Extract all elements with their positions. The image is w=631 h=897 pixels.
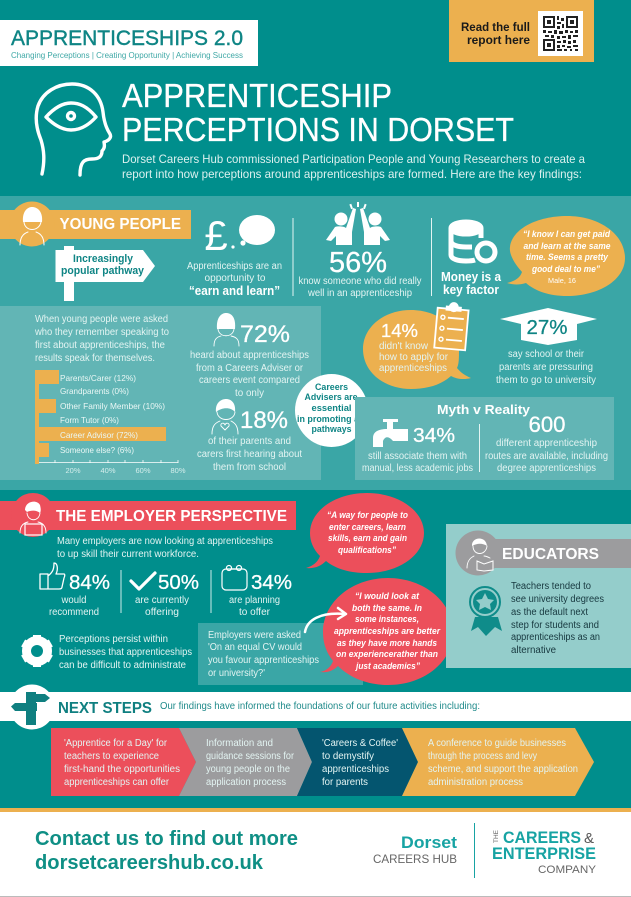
logo: The Careers & Enterprise Company: ENTERPRISE (492, 844, 596, 863)
contact text: dorsetcareershub.co.uk (35, 851, 264, 874)
quote bubble: male, 16: and learn at the same (524, 241, 611, 252)
icon: graduation cap with 27%: 27% (526, 316, 568, 339)
icon: young person with hard hat (214, 313, 239, 346)
stat: 50% currently offering: are currently (135, 595, 189, 606)
bar chart: first contact: 20% (65, 466, 81, 475)
text: pressured to go to university: them to go to university (496, 375, 596, 386)
logo: The Careers & Enterprise Company: THE (494, 830, 500, 843)
stat: 84% would recommend: 84% (69, 571, 110, 594)
text: earn and learn: Apprenticeships are an (187, 261, 282, 272)
bar chart: first contact: Parents/Carer (12%) (60, 373, 136, 383)
icon: graduation cap with 27% (500, 308, 597, 345)
bar chart: first contact: Other Family Member (10%) (60, 401, 165, 411)
text: money is a key factor: key factor (443, 283, 499, 297)
quote bubble: male, 16: Male, 16 (548, 278, 576, 285)
logo: The Careers & Enterprise Company: CAREERS (503, 828, 581, 847)
stat: 18%: carers first hearing about (197, 449, 302, 460)
stat: 50% currently offering: 50% (158, 571, 199, 594)
title (122, 78, 514, 149)
panel: myth v reality: degree apprenticeships (497, 463, 596, 474)
arrow step: conference (402, 728, 594, 796)
quote bubble: a way for people: “A way for people to (327, 510, 408, 521)
signpost: increasingly popular pathway: Increasingly (73, 253, 134, 265)
intro text: report into how perceptions around apprenticeships are formed. Here are the key findings: (122, 167, 582, 181)
quote bubble: look at both the same: on experiencerather than (336, 649, 438, 660)
arrow step: conference: through the process and levy (428, 751, 537, 762)
text: teachers tended to: see university degrees (511, 594, 604, 605)
quote bubble: look at both the same: “I would look at (355, 591, 420, 602)
heading: next steps: NEXT STEPS (58, 700, 152, 717)
intro text (122, 152, 585, 181)
stat: 18%: them from school (213, 462, 286, 473)
panel: employers were asked: you favour apprenticeships (208, 655, 319, 666)
panel: young people (0, 196, 631, 490)
heading: educators: EDUCATORS (502, 546, 599, 563)
bar chart: first contact: 40% (100, 466, 116, 475)
panel: employers were asked (198, 623, 363, 685)
callout: careers advisers are essential (295, 374, 368, 447)
contact text (35, 827, 298, 874)
logo: The Careers & Enterprise Company: & (584, 830, 594, 847)
signpost: increasingly popular pathway: popular pathway (61, 265, 145, 277)
quote bubble: a way for people: skills, earn and gain (328, 533, 407, 544)
arrow step: careers and coffee: apprenticeships (322, 764, 389, 775)
stat: 56%: 56% (329, 247, 387, 279)
icon: gear (21, 635, 53, 667)
panel: educators (446, 524, 631, 668)
callout: read the full report with QR code: report here (467, 33, 530, 47)
stat: 84% would recommend: would (61, 595, 86, 606)
stat: 56%: know someone who did really (298, 276, 422, 287)
arrow step: information and guidance: application process (206, 777, 286, 788)
panel: employers were asked: Employers were asked (208, 630, 301, 641)
icon: tap (373, 419, 408, 447)
arrow step: apprentice for a day (51, 728, 196, 796)
arrow step: apprentice for a day: teachers to experience (64, 751, 159, 762)
callout: careers advisers are essential: in promoting all (297, 414, 364, 424)
panel: myth v reality: still associate them with (368, 451, 467, 462)
text: chart intro: first about apprenticeships, the (35, 340, 165, 351)
panel: who they spoke to first (0, 306, 321, 480)
icon: rosette (470, 587, 502, 636)
text: teachers tended to: as the default next (511, 607, 588, 618)
quote bubble: a way for people: qualifications” (338, 545, 396, 556)
text: earn and learn (187, 261, 282, 298)
arrow step: careers and coffee (297, 728, 418, 796)
heading: the employer perspective (0, 493, 296, 537)
panel: employer perspective (0, 493, 453, 685)
callout: careers advisers are essential: essential (312, 403, 352, 413)
icon: check mark (131, 573, 155, 589)
logo: Dorset Careers Hub (373, 833, 457, 866)
heading: next steps (0, 684, 631, 730)
heading: next steps: Our findings have informed the foundations of our future activities including: (160, 701, 480, 712)
callout: careers advisers are essential: Advisers are (304, 392, 358, 402)
quote bubble: male, 16: “I know I can get paid (523, 229, 610, 240)
arrow step: conference: administration process (428, 777, 523, 788)
text: pressured to go to university: say school or their (508, 349, 585, 360)
stat: 72%: from a Careers Adviser or (196, 363, 304, 374)
quote bubble: look at both the same (320, 578, 453, 685)
callout: read the full report with QR code: Read the full (461, 20, 530, 34)
bar chart: first contact: Someone else? (6%) (60, 445, 134, 455)
text: perceptions persist (59, 634, 192, 671)
quote bubble: a way for people: enter careers, learn (329, 522, 406, 533)
bubble: 14% didn't know how to apply: how to apply for (379, 352, 449, 363)
header banner: Apprenticeships 2.0: Changing Perceptions | Creating Opportunity | Achieving Success (11, 50, 243, 60)
arrow step: information and guidance: guidance sessions for (206, 751, 295, 762)
footer (0, 808, 631, 897)
title: PERCEPTIONS IN DORSET (122, 112, 514, 149)
header banner: Apprenticeships 2.0: APPRENTICESHIPS 2.0 (11, 26, 243, 50)
stat: 34% planning to offer: to offer (239, 607, 271, 618)
panel: myth v reality: 34% (413, 424, 455, 447)
text: teachers tended to: alternative (511, 645, 556, 656)
arrow step: information and guidance: Information and (206, 738, 273, 749)
icon: coins (451, 222, 495, 261)
icon: calendar (222, 566, 247, 590)
icon: high five (326, 202, 390, 245)
text: employers upskilling (57, 536, 273, 560)
signpost: increasingly popular pathway (56, 246, 155, 301)
text: chart intro: results speak for themselves. (35, 353, 155, 364)
logo: Dorset Careers Hub: CAREERS HUB (373, 852, 457, 866)
arrow step: apprentice for a day: first-hand the opportunities (64, 764, 180, 775)
quote bubble: look at both the same: as they have more hands (337, 638, 437, 649)
bubble: 14% didn't know how to apply (363, 301, 471, 389)
arrow step: careers and coffee: for parents (322, 777, 368, 788)
bar chart: first contact: 60% (135, 466, 151, 475)
title: APPRENTICESHIP (122, 78, 392, 115)
text: teachers tended to: Teachers tended to (511, 581, 591, 592)
text: teachers tended to: step for students and (511, 620, 599, 631)
text: teachers tended to (511, 581, 604, 656)
text: perceptions persist: can be difficult to administrate (59, 660, 186, 671)
panel: myth v reality: routes are available, including (485, 451, 608, 462)
bubble: 14% didn't know how to apply: didn't know (379, 341, 429, 352)
stat: 34% planning to offer: 34% (251, 571, 292, 594)
callout: careers advisers are essential: pathways (312, 424, 352, 434)
arrow step: information and guidance: young people on the (206, 764, 290, 775)
icon: pound and thought bubble (204, 212, 275, 259)
arrow step: conference: A conference to guide businesses (428, 738, 566, 749)
logo: Dorset Careers Hub: Dorset (401, 833, 457, 852)
callout: careers advisers are essential: Careers (315, 382, 348, 392)
arrow step: conference: scheme, and support the application (428, 764, 578, 775)
arrow step: careers and coffee: to demystify (322, 751, 374, 762)
bar chart: first contact: 80% (170, 466, 186, 475)
quote bubble: look at both the same: just academics” (354, 661, 420, 672)
bar chart: first contact: Grandparents (0%) (60, 386, 129, 396)
panel: employers were asked: 'On an equal CV would (208, 642, 302, 653)
panel: myth v reality: Myth v Reality (437, 402, 531, 417)
quote bubble: male, 16: time. Seems a pretty (526, 252, 609, 263)
arrow: question to answer (305, 608, 346, 632)
stat: 18%: 18% (240, 407, 288, 434)
text: pressured to go to university (496, 349, 596, 386)
stat: 56%: well in an apprenticeship (307, 288, 412, 299)
quote bubble: male, 16 (507, 216, 625, 296)
text: earn and learn: opportunity to (204, 273, 266, 284)
arrow step: careers and coffee: 'Careers & Coffee' (322, 738, 398, 749)
heading: young people (0, 202, 191, 246)
text: employers upskilling: Many employers are now looking at apprenticeships (57, 536, 273, 547)
heading: educators (456, 530, 631, 576)
heading: the employer perspective: THE EMPLOYER PERSPECTIVE (56, 508, 287, 525)
bar chart: first contact (35, 370, 186, 475)
quote bubble: male, 16: good deal to me” (531, 264, 600, 275)
logo: The Careers & Enterprise Company: COMPANY (538, 864, 597, 876)
panel: myth v reality: 600 (528, 412, 566, 437)
quote bubble: a way for people (306, 493, 424, 573)
text: pressured to go to university: parents are pressuring (499, 362, 593, 373)
arrow step: information and guidance (179, 728, 312, 796)
stat: 72%: heard about apprenticeships (190, 350, 309, 361)
text: perceptions persist: Perceptions persist within (59, 634, 168, 645)
quote bubble: look at both the same: both the same. In (352, 603, 422, 614)
intro text: Dorset Careers Hub commissioned Participation People and Young Researchers to create a (122, 152, 585, 166)
stat: 18% (197, 407, 302, 473)
stat: 34% planning to offer: are planning (229, 595, 280, 606)
text: chart intro: who they remember speaking to (34, 327, 169, 338)
stat: 72%: 72% (240, 321, 290, 348)
text: earn and learn: “earn and learn” (189, 284, 280, 298)
stat: 50% currently offering (135, 571, 199, 618)
arrow step: apprentice for a day: 'Apprentice for a Day' for (64, 738, 168, 749)
stat: 18%: of their parents and (208, 436, 291, 447)
stat: 50% currently offering: offering (145, 607, 179, 618)
panel: myth v reality: different apprenticeship (496, 438, 597, 449)
icon: head with eye (36, 84, 111, 175)
text: money is a key factor: Money is a (441, 270, 502, 284)
text: money is a key factor (441, 270, 502, 297)
header banner: Apprenticeships 2.0 (0, 20, 258, 66)
quote bubble: look at both the same: some instances, (355, 614, 419, 625)
stat: 84% would recommend: recommend (49, 607, 99, 618)
text: chart intro: When young people were asked (35, 314, 168, 325)
text: perceptions persist: businesses that apprenticeships (59, 647, 192, 658)
text: teachers tended to: apprenticeships as an (511, 632, 600, 643)
bubble: 14% didn't know how to apply: apprenticeships (379, 363, 447, 374)
heading: young people: YOUNG PEOPLE (60, 216, 181, 233)
quote bubble: look at both the same: apprenticeships are better (334, 626, 441, 637)
bar chart: first contact: Form Tutor (0%) (60, 415, 119, 425)
icon: thumbs up (40, 563, 65, 589)
stat: 34% planning to offer (229, 571, 292, 618)
icon: parent with heart (212, 399, 238, 434)
panel: next steps (0, 684, 631, 796)
panel: myth v reality (355, 397, 614, 480)
callout: read the full report with QR code (449, 0, 594, 62)
text: employers upskilling: to up skill their current workforce. (57, 549, 199, 560)
bar chart: first contact: Career Advisor (72%) (60, 430, 138, 440)
stat: 72% (190, 321, 309, 399)
icon: pound and thought bubble: £ (204, 212, 228, 259)
bubble: 14% didn't know how to apply: 14% (381, 320, 418, 341)
icon: clipboard (434, 301, 469, 350)
stat: 56% (298, 247, 422, 299)
text: chart intro (34, 314, 169, 364)
stat: 72%: to only (235, 388, 264, 399)
panel: myth v reality: manual, less academic jobs (362, 463, 473, 474)
contact text: Contact us to find out more (35, 827, 298, 850)
stat: 84% would recommend (49, 571, 110, 618)
logo: The Careers & Enterprise Company (492, 828, 597, 876)
panel: employers were asked: or university?' (208, 668, 265, 679)
stat: 72%: careers event compared (199, 375, 300, 386)
arrow step: apprentice for a day: apprenticeships can offer (64, 777, 170, 788)
